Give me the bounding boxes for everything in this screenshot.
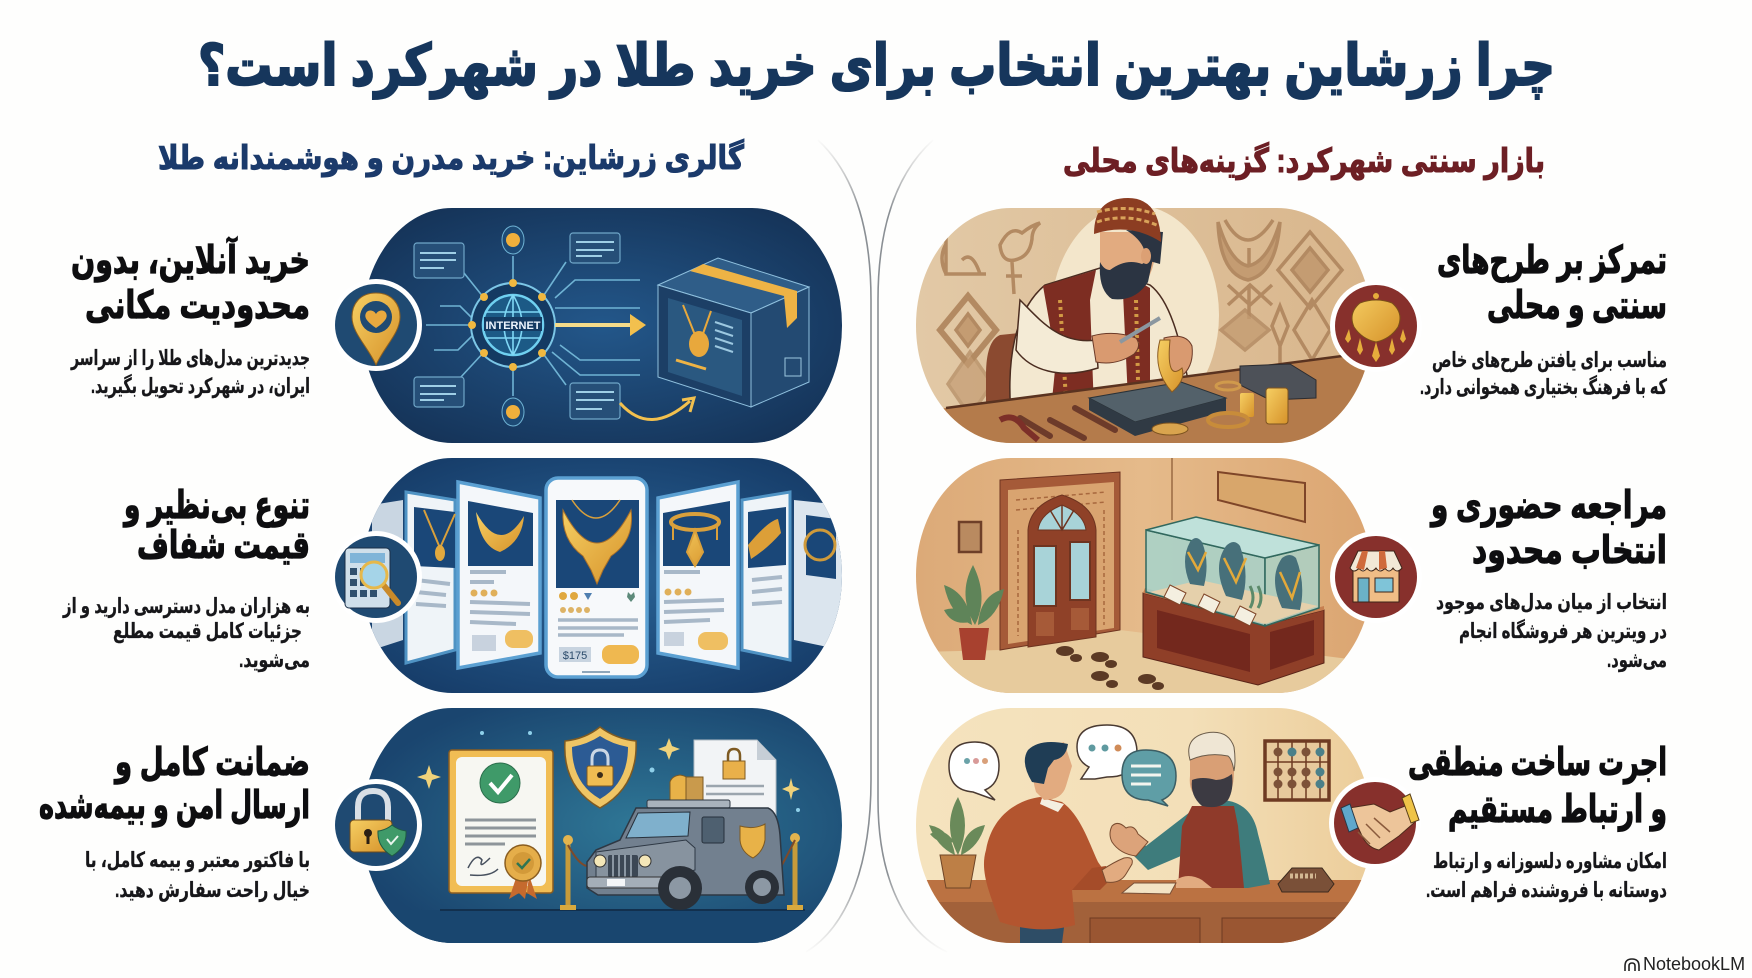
text block: guarantee and insured delivery: خیال راحت سفارش دهید. <box>115 879 310 902</box>
outer phones <box>372 492 842 663</box>
icon: location pin with heart <box>330 279 422 371</box>
text block: variety and transparent price: قیمت شفاف <box>137 525 310 567</box>
heading: traditional market column: بازار سنتی شهرکرد: گزینه‌های محلی <box>1063 141 1545 181</box>
text block: in-person visit: انتخاب محدود <box>1472 530 1667 573</box>
text block: variety and transparent price: می‌شوید. <box>239 649 310 672</box>
text block: variety and transparent price: جزئیات کامل قیمت مطلع <box>113 620 302 643</box>
right phone <box>658 482 738 668</box>
counter <box>926 880 1362 943</box>
picture frame <box>959 522 981 552</box>
text block: making fee and direct contact <box>1408 742 1667 902</box>
shield with lock <box>565 727 636 808</box>
armored truck <box>587 775 784 910</box>
curved arrow <box>620 398 694 420</box>
panel: traditional shop visit illustration <box>916 458 1372 693</box>
icon: calculator with magnifier <box>330 531 422 623</box>
text block: online shopping <box>70 236 310 398</box>
glass display case <box>1143 517 1324 685</box>
panel: guarantee and secure delivery illustration <box>362 708 842 943</box>
plant on counter <box>929 797 985 888</box>
certificate <box>449 750 553 899</box>
document cards <box>414 233 620 419</box>
globe hub: INTERNET <box>486 320 541 332</box>
text block: guarantee and insured delivery <box>39 742 310 902</box>
text block: guarantee and insured delivery: ضمانت کامل و <box>114 742 310 785</box>
text block: traditional designs: سنتی و محلی <box>1487 285 1667 328</box>
center phone <box>546 478 647 677</box>
potted plant <box>944 565 1004 660</box>
NotebookLM watermark: NotebookLM <box>1643 954 1745 974</box>
panel: online purchase network illustration <box>362 208 842 443</box>
sparkles <box>417 738 800 800</box>
icon: gold pendant <box>1330 280 1422 372</box>
secured document <box>694 740 776 816</box>
panel: traditional goldsmith illustration <box>916 198 1372 443</box>
abacus <box>1265 741 1329 800</box>
text block: in-person visit <box>1430 485 1667 672</box>
rope posts <box>560 833 803 910</box>
arrow to package <box>555 314 646 336</box>
icon: handshake <box>1329 777 1421 869</box>
teal speech bubble <box>1122 750 1176 806</box>
panel: direct conversation illustration <box>916 708 1372 948</box>
calculator and paper <box>1122 868 1334 894</box>
text block: guarantee and insured delivery: ارسال امن و بیمه‌شده <box>39 785 310 828</box>
text block: traditional designs <box>1420 240 1668 399</box>
customer <box>984 742 1132 943</box>
text block: online shopping: محدودیت مکانی <box>85 285 310 328</box>
goldsmith chair <box>986 333 1016 402</box>
text block: variety and transparent price: تنوع بی‌نظیر و <box>123 485 310 528</box>
text block: guarantee and insured delivery: با فاکتور معتبر و بیمه کامل، با <box>85 849 310 872</box>
text block: in-person visit: در ویترین هر فروشگاه انجام <box>1459 618 1667 643</box>
speech bubbles <box>949 725 1137 800</box>
seller <box>1110 732 1270 888</box>
text block: in-person visit: انتخاب از میان مدل‌های موجود <box>1436 591 1667 614</box>
wall plaque <box>1218 472 1305 522</box>
panel: product variety phones illustration <box>362 458 842 693</box>
shop door <box>1000 472 1120 650</box>
text block: online shopping: ایران، در شهرکرد تحویل بگیرید. <box>91 373 310 398</box>
text block: variety and transparent price <box>62 485 310 672</box>
text block: online shopping: جدیدترین مدل‌های طلا را از سراسر <box>70 347 310 370</box>
text block: in-person visit: می‌شود. <box>1607 649 1667 672</box>
text block: making fee and direct contact: دوستانه با فروشنده فراهم است. <box>1426 879 1667 902</box>
goldsmith head and cap <box>1094 198 1163 299</box>
globe hub <box>468 279 555 371</box>
center phone: $175 <box>563 650 587 662</box>
icon: storefront <box>1330 531 1422 623</box>
left phone <box>458 482 540 668</box>
footprints <box>1056 646 1164 690</box>
top and bottom nodes <box>502 226 524 426</box>
text block: online shopping: خرید آنلاین، بدون <box>71 236 310 283</box>
text block: in-person visit: مراجعه حضوری و <box>1430 485 1667 528</box>
heading: Zarshine gallery column: گالری زرشاین: خرید مدرن و هوشمندانه طلا <box>158 138 745 178</box>
package box <box>658 258 809 407</box>
central curved divider <box>806 140 947 952</box>
icon: padlock with shield <box>330 779 422 871</box>
table <box>944 357 1365 443</box>
bubble text lines <box>1131 766 1161 784</box>
network lines <box>426 256 640 396</box>
text block: variety and transparent price: به هزاران مدل دسترسی دارید و از <box>62 595 310 618</box>
